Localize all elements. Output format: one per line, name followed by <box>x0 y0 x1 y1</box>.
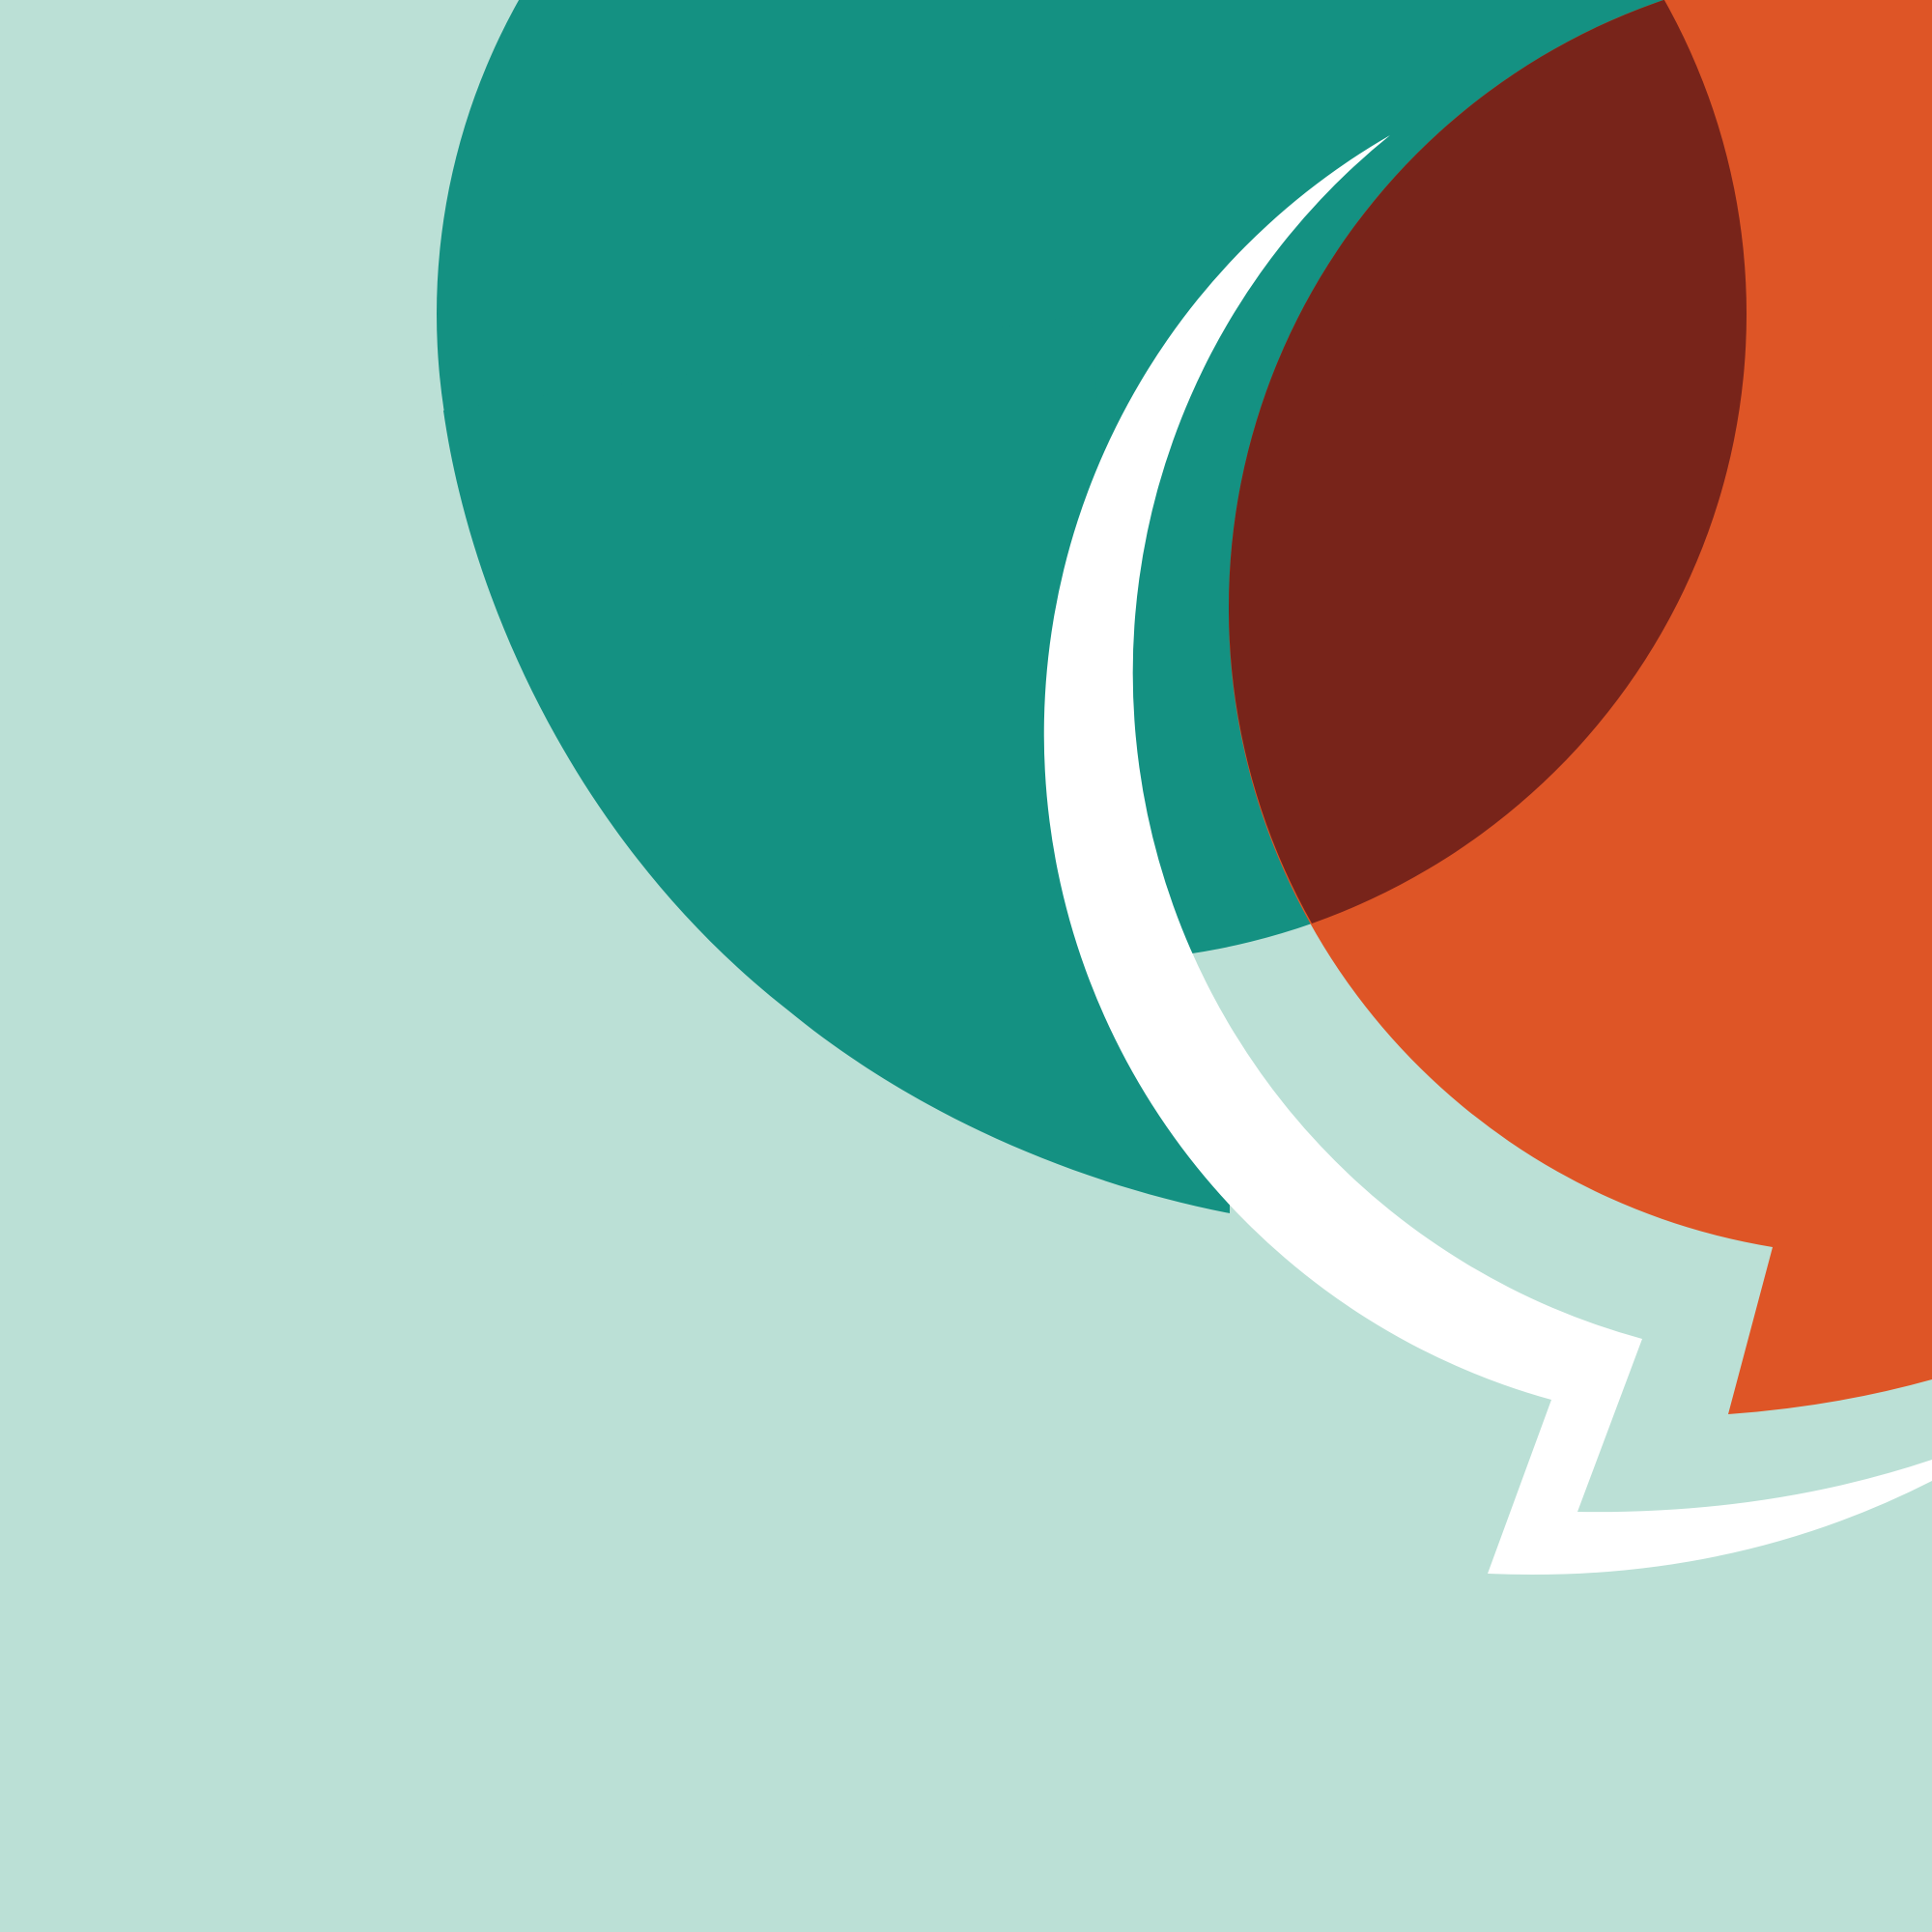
white crescent speech bubble outline <box>1044 135 1932 1575</box>
dark overlap of bubbles <box>1229 0 1747 923</box>
teal speech bubble <box>437 0 1747 1213</box>
orange speech bubble <box>1229 0 1932 1414</box>
speech bubble illustration <box>437 0 1932 1575</box>
